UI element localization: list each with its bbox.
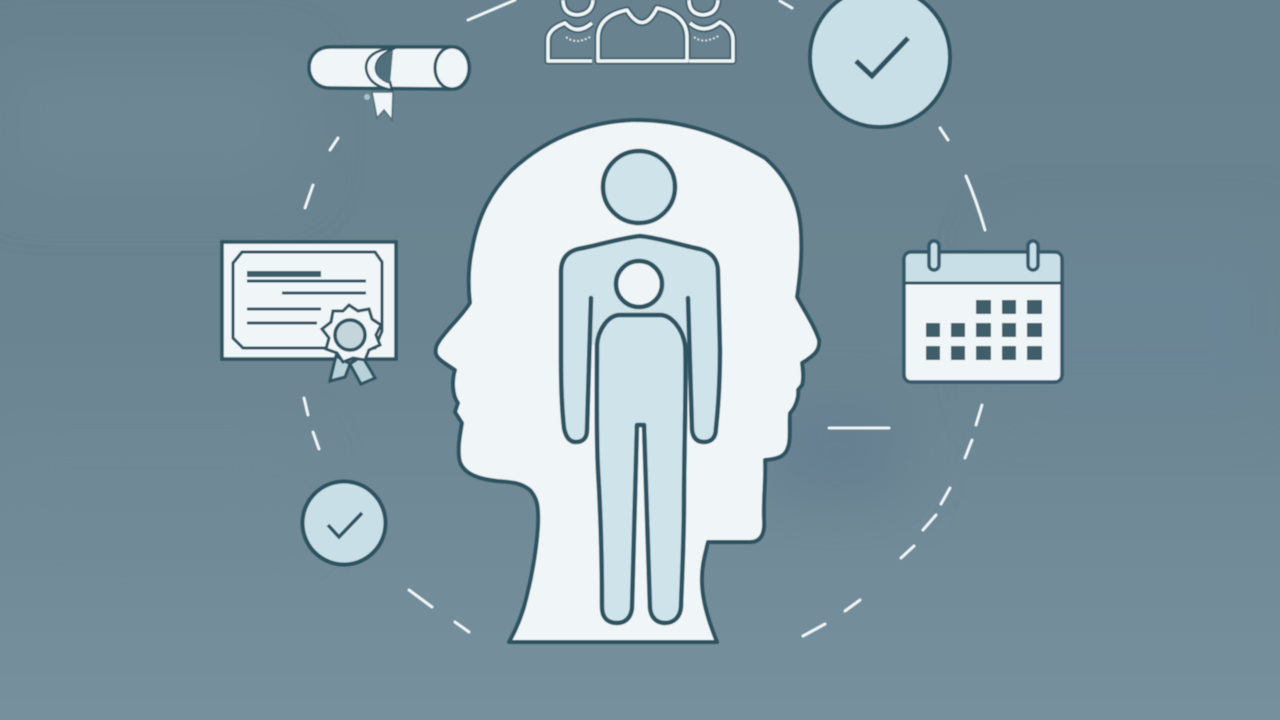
icon: certificate xyxy=(222,242,396,384)
icon: large check badge xyxy=(810,0,950,127)
top head circle xyxy=(603,151,675,223)
dashed circle xyxy=(304,0,985,636)
icon: calendar xyxy=(904,241,1062,382)
adult figure xyxy=(561,151,720,442)
child head circle xyxy=(616,261,662,307)
icon: group of people xyxy=(548,0,733,61)
adult torso and arms xyxy=(561,236,720,442)
icon: small check badge xyxy=(302,482,386,564)
icon: diploma scroll xyxy=(309,47,469,120)
child figure xyxy=(597,261,686,623)
head silhouette xyxy=(436,120,819,642)
